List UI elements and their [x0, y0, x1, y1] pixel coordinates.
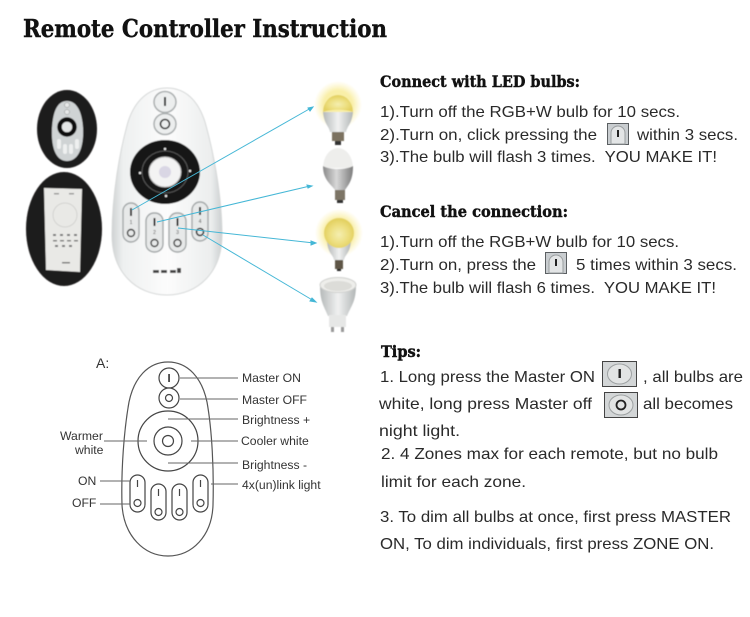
bulb: warm lit small base — [315, 209, 363, 271]
icon: zone on key — [546, 252, 566, 274]
icon: zone on key — [608, 124, 628, 144]
connect step 2: within 3 secs. — [636, 127, 738, 144]
tip 1: white, long press Master off — [378, 396, 593, 413]
main remote photo — [112, 88, 222, 295]
cancel step 2: 2).Turn on, press the — [380, 257, 536, 274]
tip 1: all becomes — [643, 396, 733, 413]
bulb: aluminium A-shape — [323, 148, 353, 203]
icon: master on key — [602, 362, 636, 386]
tip 3: ON, To dim individuals, first press ZONE ON. — [380, 536, 714, 553]
label: on: ON — [78, 474, 96, 488]
master on key — [154, 92, 176, 112]
tip 2 — [381, 446, 718, 491]
master on button — [159, 368, 179, 388]
cancel step 1: 1).Turn off the RGB+W bulb for 10 secs. — [380, 234, 679, 251]
connect step 3: 3).The bulb will flash 3 times. YOU MAKE IT! — [380, 149, 717, 166]
panel: tips — [378, 342, 743, 553]
heading: tips: Tips: — [381, 342, 421, 361]
tip 3: 3. To dim all bulbs at once, first press MASTER — [380, 509, 731, 526]
tip 1: night light. — [379, 423, 460, 440]
label: warmer white — [60, 429, 104, 457]
tip 2: limit for each zone. — [381, 474, 526, 491]
diagram letter: A: — [96, 355, 109, 371]
panel: product photo — [26, 81, 363, 332]
icon: master off key — [604, 392, 638, 418]
title: Remote Controller Instruction — [23, 14, 387, 43]
label: warmer white: Warmer — [60, 429, 103, 443]
zone keys — [123, 202, 208, 252]
tip 2: 2. 4 Zones max for each remote, but no bulb — [381, 446, 718, 463]
label: off: OFF — [72, 496, 96, 510]
bulb: warm lit A-shape — [314, 81, 362, 145]
master off button — [159, 388, 179, 408]
label: master on: Master ON — [242, 371, 301, 385]
tip 3 — [380, 509, 731, 553]
label: brightness up: Brightness + — [242, 413, 310, 427]
label: warmer white: white — [74, 443, 104, 457]
zone keys: 1 — [130, 220, 133, 226]
master off key — [154, 114, 176, 134]
leader lines — [100, 378, 238, 504]
connect step 1: 1).Turn off the RGB+W bulb for 10 secs. — [380, 104, 680, 121]
tip 1 — [378, 362, 743, 440]
heading: cancel: Cancel the connection: — [380, 202, 568, 221]
heading: connect: Connect with LED bulbs: — [380, 72, 580, 91]
zone buttons — [130, 475, 208, 520]
thumbnail: back of remote — [26, 172, 102, 286]
connect step 2 — [380, 124, 738, 144]
arrows: zone keys to bulbs — [132, 107, 316, 302]
label: cooler white: Cooler white — [241, 434, 309, 448]
cancel step 2 — [380, 252, 737, 274]
panel: connect instructions — [380, 72, 738, 166]
thumbnail: front of remote — [37, 90, 97, 168]
zone keys: 3 — [176, 230, 179, 236]
label: brightness down: Brightness - — [242, 458, 307, 472]
colour and brightness wheel — [130, 140, 200, 204]
cancel step 2: 5 times within 3 secs. — [576, 257, 737, 274]
zone keys: 2 — [153, 230, 156, 236]
panel: cancel instructions — [380, 202, 737, 297]
label: link light: 4x(un)link light — [242, 478, 321, 492]
tip 1: 1. Long press the Master ON — [380, 369, 595, 386]
wheel — [138, 411, 198, 471]
label: master off: Master OFF — [242, 393, 307, 407]
remote outline — [122, 362, 213, 556]
panel: labelled remote diagram — [60, 355, 321, 556]
connect step 2: 2).Turn on, click pressing the — [380, 127, 597, 144]
zone keys: 4 — [199, 219, 202, 225]
logo mark — [153, 268, 181, 273]
bulb: GU10 spot — [320, 278, 356, 332]
tip 1: , all bulbs are — [643, 369, 743, 386]
cancel step 3: 3).The bulb will flash 6 times. YOU MAKE IT! — [380, 280, 716, 297]
